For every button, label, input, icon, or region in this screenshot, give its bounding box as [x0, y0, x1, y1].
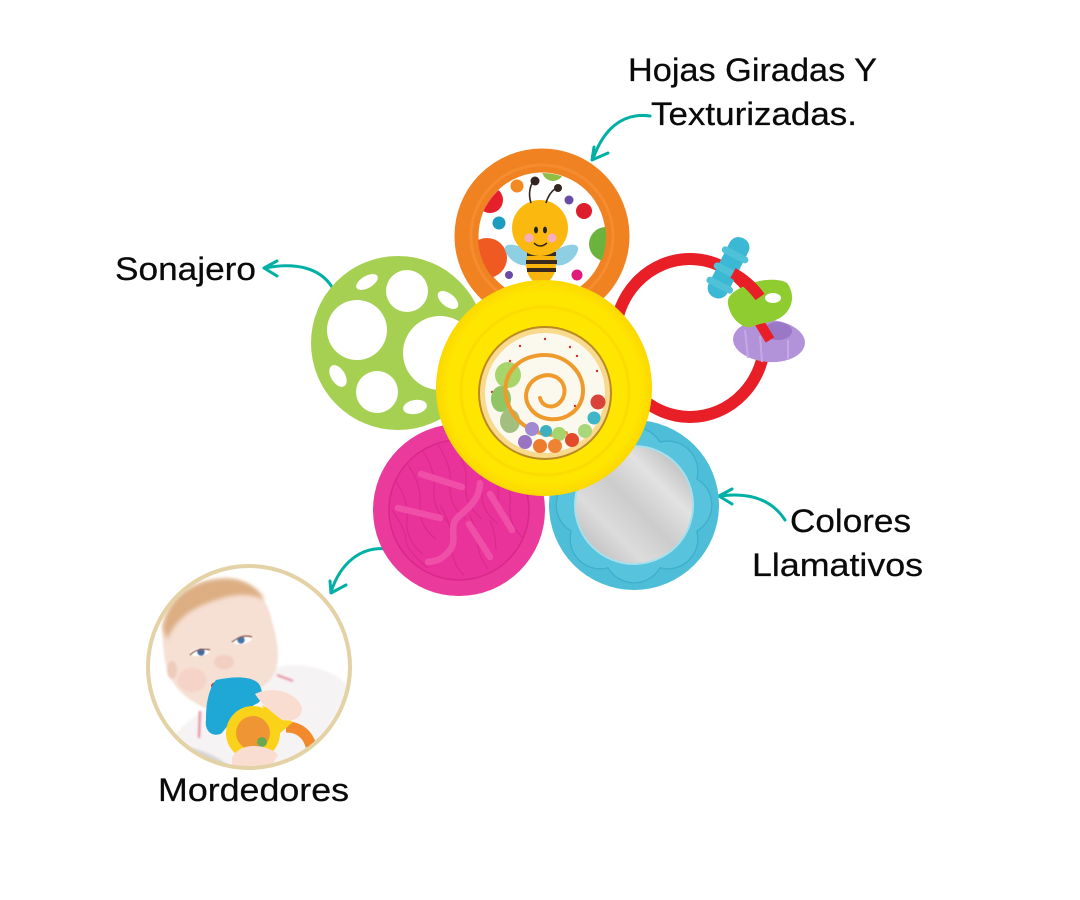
label: Mordedores: Mordedores — [158, 772, 349, 808]
label: Colores Llamativos: Llamativos — [752, 547, 923, 583]
title label: Hojas Giradas Y Texturizadas: Texturizadas. — [651, 96, 857, 132]
arrow: to blue leaf — [719, 489, 785, 520]
arrow: to green leaf — [264, 261, 332, 287]
hands — [255, 690, 302, 720]
photo: baby with teether — [148, 566, 350, 775]
toy: flower rattle — [311, 159, 806, 596]
icon: green bead — [728, 273, 792, 327]
mouth — [211, 682, 214, 688]
petal: red ring with beads — [615, 232, 806, 417]
caterpillar — [495, 362, 521, 388]
label: Colores Llamativos: Colores — [790, 503, 911, 539]
petal: pink textured — [373, 424, 545, 596]
arrow: to baby photo — [330, 549, 387, 593]
nose — [214, 655, 234, 669]
body — [176, 666, 346, 764]
title label: Hojas Giradas Y Texturizadas: Hojas Giradas Y — [628, 52, 877, 88]
petal: blue mirror — [549, 420, 719, 590]
beads — [590, 394, 606, 410]
icon: bee — [505, 176, 578, 284]
hair — [163, 579, 265, 640]
title label: Hojas Giradas Y Texturizadas — [628, 52, 877, 132]
petal: green with holes — [311, 256, 485, 430]
petal: orange bee — [466, 159, 623, 312]
label: Colores Llamativos — [752, 503, 923, 583]
center: yellow hub — [436, 280, 652, 496]
blue teether — [206, 677, 262, 735]
spiral — [505, 355, 583, 435]
arrow: to orange leaf — [592, 115, 650, 160]
yellow teether — [226, 706, 280, 754]
head — [162, 578, 278, 709]
icon: purple bead — [732, 318, 806, 364]
icon: window with spiral and beads — [479, 327, 611, 459]
orange handle — [286, 727, 311, 746]
eyes — [190, 634, 253, 657]
icon: blue bead — [701, 232, 756, 304]
label: Sonajero: Sonajero — [115, 251, 256, 287]
